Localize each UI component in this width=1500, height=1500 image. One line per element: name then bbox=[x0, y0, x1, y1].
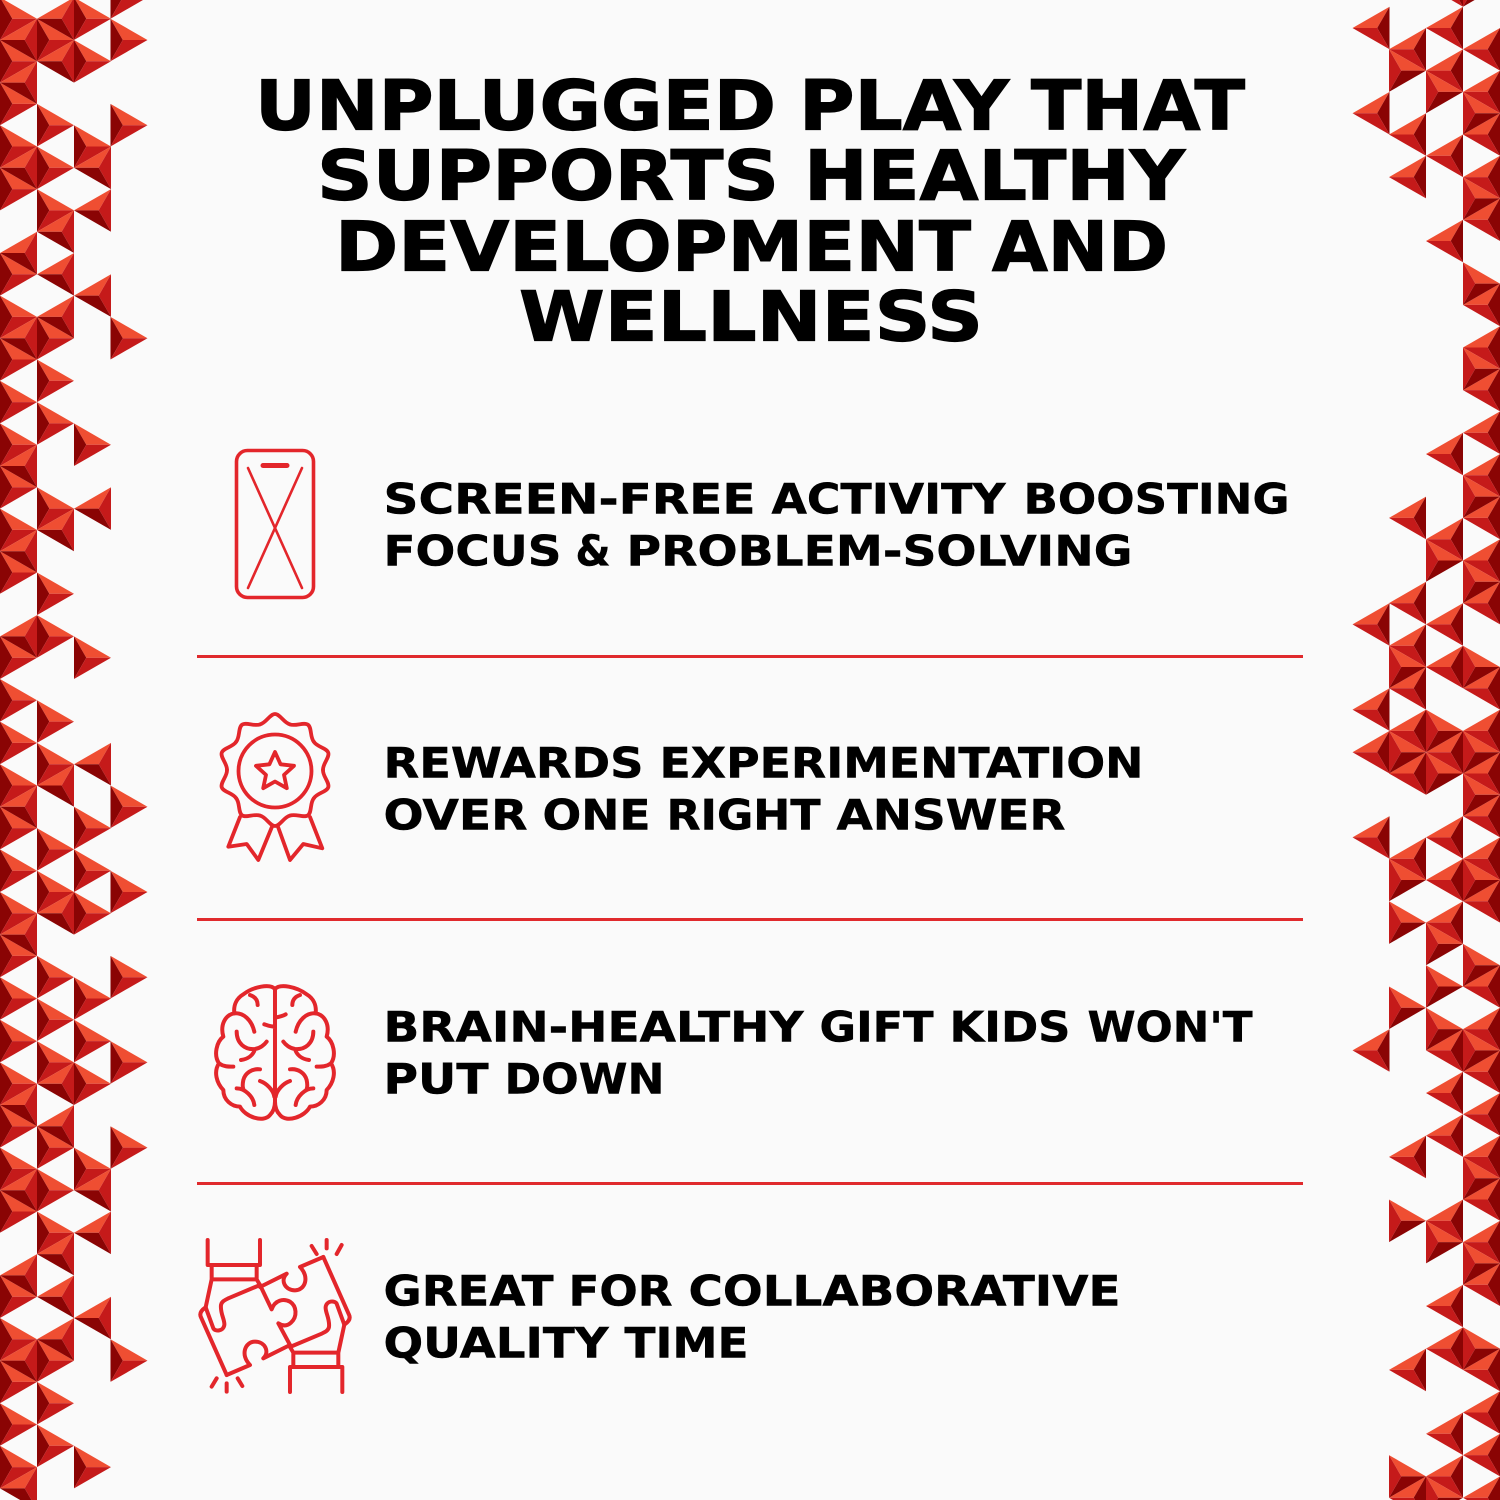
icon: brain bbox=[216, 986, 334, 1119]
divider 1 bbox=[197, 655, 1303, 658]
left triangle pattern bbox=[0, 0, 148, 1500]
panel: screen-free activity bbox=[236, 450, 1290, 598]
text: collaborative quality time: FOR bbox=[568, 1266, 672, 1316]
text: rewards experimentation: REWARDS bbox=[384, 738, 644, 788]
text: rewards experimentation: EXPERIMENTATION bbox=[660, 738, 1144, 788]
title: HEALTHY bbox=[804, 136, 1187, 216]
icon: hands joining puzzle pieces bbox=[200, 1240, 350, 1392]
title: THAT bbox=[1031, 66, 1245, 146]
panel: rewards experimentation bbox=[217, 714, 1144, 860]
text: screen-free activity bbox=[384, 474, 1290, 576]
icon: phone crossed out bbox=[236, 450, 314, 598]
text: screen-free activity: FOCUS bbox=[384, 526, 562, 576]
text: collaborative quality time bbox=[384, 1266, 1120, 1368]
text: collaborative quality time: GREAT bbox=[384, 1266, 554, 1316]
title: PLAY bbox=[799, 66, 1011, 146]
title bbox=[255, 66, 1245, 358]
panel: brain-healthy gift bbox=[216, 986, 1253, 1119]
title: DEVELOPMENT bbox=[335, 208, 971, 288]
text: brain-healthy gift: DOWN bbox=[504, 1054, 664, 1104]
text: collaborative quality time: TIME bbox=[624, 1318, 748, 1368]
divider 3 bbox=[197, 1182, 1303, 1185]
title: SUPPORTS bbox=[317, 136, 779, 216]
text: brain-healthy gift: PUT bbox=[384, 1054, 489, 1104]
right triangle pattern bbox=[1352, 0, 1500, 1500]
title: UNPLUGGED bbox=[255, 66, 776, 146]
divider 2 bbox=[197, 918, 1303, 921]
text: screen-free activity: PROBLEM-SOLVING bbox=[626, 526, 1132, 576]
text: rewards experimentation: RIGHT bbox=[666, 790, 821, 840]
text: brain-healthy gift: BRAIN-HEALTHY bbox=[384, 1002, 804, 1052]
text: brain-healthy gift bbox=[384, 1002, 1253, 1104]
text: screen-free activity: BOOSTING bbox=[1024, 474, 1290, 524]
text: rewards experimentation: ANSWER bbox=[836, 790, 1066, 840]
text: rewards experimentation: OVER bbox=[384, 790, 528, 840]
text: brain-healthy gift: KIDS bbox=[950, 1002, 1070, 1052]
text: collaborative quality time: COLLABORATIVE bbox=[688, 1266, 1120, 1316]
text: screen-free activity: SCREEN-FREE bbox=[384, 474, 756, 524]
text: rewards experimentation bbox=[384, 738, 1144, 840]
title: AND bbox=[992, 208, 1168, 288]
text: brain-healthy gift: GIFT bbox=[820, 1002, 934, 1052]
text: screen-free activity: ACTIVITY bbox=[772, 474, 1006, 524]
title: WELLNESS bbox=[519, 278, 983, 358]
text: collaborative quality time: QUALITY bbox=[384, 1318, 609, 1368]
text: rewards experimentation: ONE bbox=[542, 790, 650, 840]
text: screen-free activity: & bbox=[576, 526, 610, 576]
text: brain-healthy gift: WON'T bbox=[1088, 1002, 1253, 1052]
panel: collaborative quality time bbox=[200, 1240, 1120, 1392]
icon: award rosette bbox=[217, 714, 333, 860]
